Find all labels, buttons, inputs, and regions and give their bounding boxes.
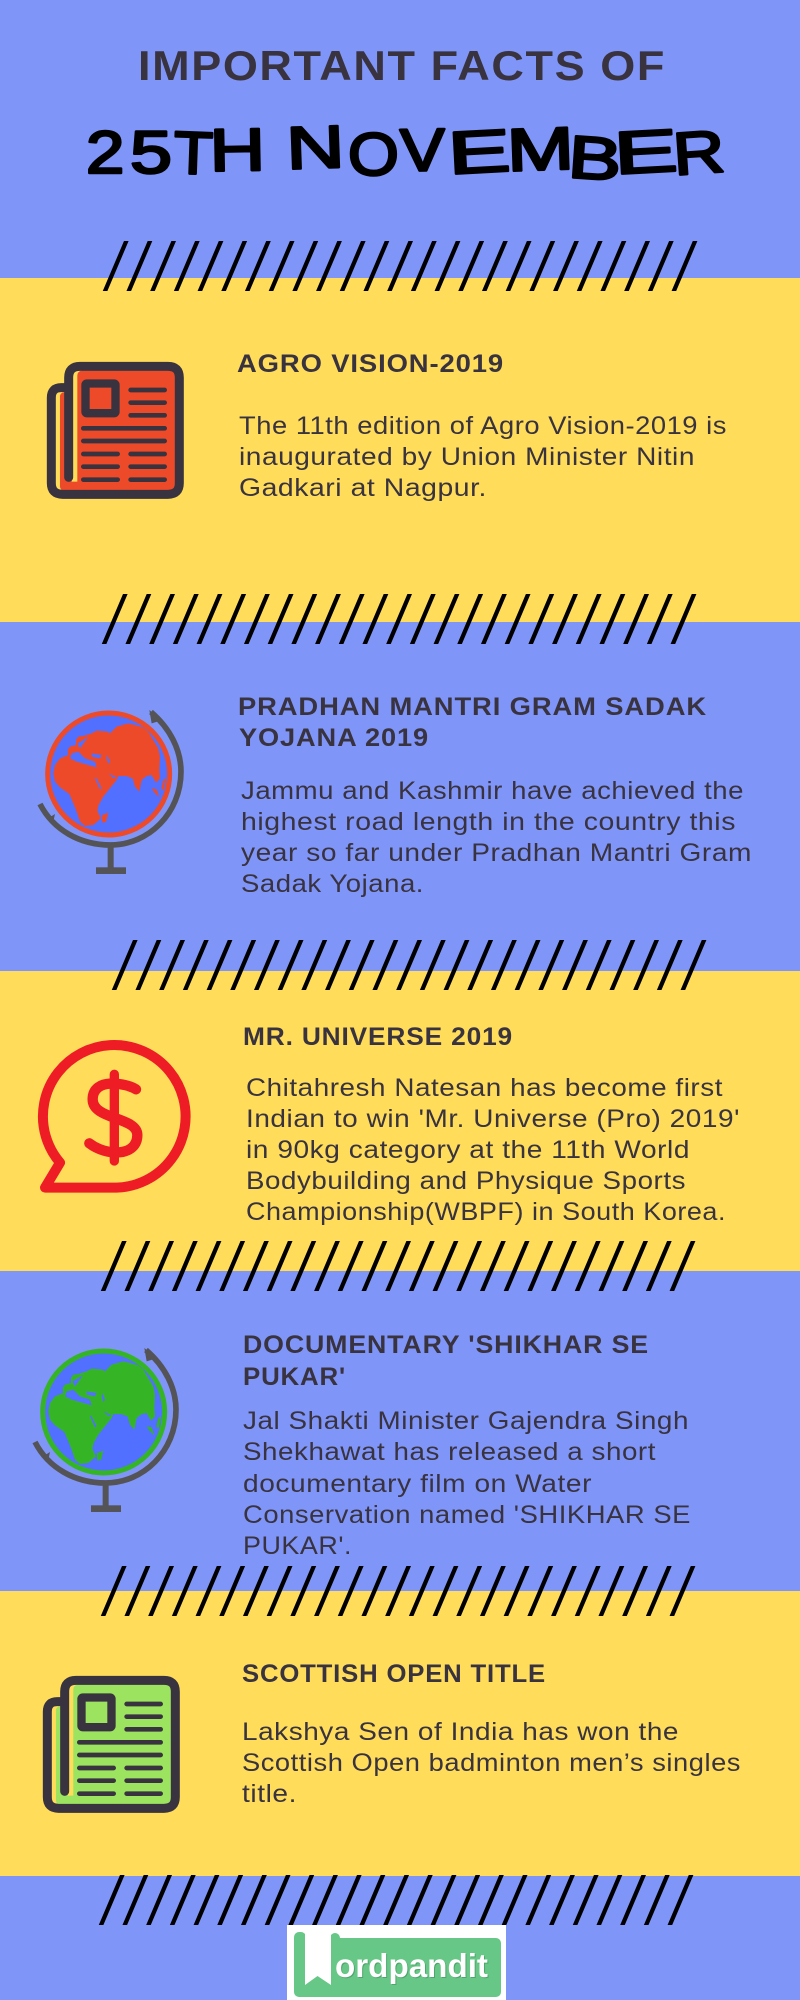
text block: Documentary body: Conservation named 'SHIKHAR SE — [243, 1501, 691, 1529]
logo: Wordpandit: ordpandit — [336, 1948, 489, 1985]
heading: Documentary Shikhar Se Pukar: PUKAR' — [243, 1363, 346, 1391]
panel: Mr. Universe yellow band — [0, 971, 800, 1271]
text block: Pradhan Mantri body — [241, 777, 752, 898]
heading: Documentary Shikhar Se Pukar — [243, 1331, 649, 1391]
text block: Documentary body: Jal Shakti Minister Gajendra Singh — [243, 1407, 689, 1435]
text block: Agro Vision body — [239, 412, 727, 502]
icon: green newspaper — [47, 1680, 175, 1808]
title: 25th November — [86, 114, 727, 193]
text block: Pradhan Mantri body: highest road length in the country this — [241, 808, 736, 836]
title: 25th November: H — [209, 116, 266, 184]
text block: Scottish Open body: title. — [242, 1780, 297, 1808]
text block: Scottish Open body — [242, 1718, 741, 1808]
heading: Pradhan Mantri Gram Sadak Yojana 2019 — [238, 693, 707, 752]
title: 25th November: 2 — [86, 118, 124, 186]
title: 25th November: 5 — [130, 119, 172, 186]
logo: Wordpandit: ordpandit — [335, 1947, 488, 1984]
panel: Agro Vision yellow band — [0, 278, 800, 622]
title: 25th November: E — [612, 117, 679, 187]
heading: Mr. Universe 2019: MR. UNIVERSE 2019 — [243, 1023, 513, 1051]
title: Important Facts Of: IMPORTANT FACTS OF — [138, 42, 666, 89]
text block: Mr. Universe body: in 90kg category at the 11th World — [246, 1136, 690, 1164]
title: 25th November: O — [348, 121, 399, 188]
text block: Documentary body — [243, 1407, 691, 1560]
text block: Documentary body: documentary film on Water — [243, 1470, 592, 1498]
text block: Documentary body: PUKAR'. — [243, 1532, 352, 1560]
text block: Mr. Universe body: Championship(WBPF) in South Korea. — [246, 1198, 726, 1226]
icon: red globe — [40, 710, 181, 874]
text block: Mr. Universe body: Chitahresh Natesan has become first — [246, 1074, 723, 1102]
title: 25th November: B — [566, 123, 624, 193]
title: 25th November: N — [285, 114, 345, 183]
text block: Scottish Open body: Lakshya Sen of India has won the — [242, 1718, 679, 1746]
icon: green globe — [35, 1348, 176, 1512]
title: 25th November: R — [671, 117, 727, 188]
text block: Documentary body: Shekhawat has released a short — [243, 1438, 656, 1466]
text block: Pradhan Mantri body: Sadak Yojana. — [241, 870, 424, 898]
heading: Documentary Shikhar Se Pukar: DOCUMENTARY 'SHIKHAR SE — [243, 1331, 649, 1359]
text block: Agro Vision body: inaugurated by Union Minister Nitin — [239, 443, 695, 471]
text block: Scottish Open body: Scottish Open badminton men’s singles — [242, 1749, 741, 1777]
panel: Scottish Open yellow band — [0, 1591, 800, 1876]
heading: Pradhan Mantri Gram Sadak Yojana 2019: YOJANA 2019 — [239, 724, 429, 752]
text block: Mr. Universe body: Bodybuilding and Physique Sports — [246, 1167, 686, 1195]
title: 25th November: E — [446, 117, 512, 187]
heading: Pradhan Mantri Gram Sadak Yojana 2019: PRADHAN MANTRI GRAM SADAK — [238, 693, 707, 721]
icon: dollar speech bubble — [43, 1045, 186, 1188]
text block: Mr. Universe body: Indian to win 'Mr. Universe (Pro) 2019' — [246, 1105, 740, 1133]
title: 25th November: V — [400, 117, 446, 184]
text block: Pradhan Mantri body: year so far under Pradhan Mantri Gram — [241, 839, 752, 867]
heading: Scottish Open Title: SCOTTISH OPEN TITLE — [242, 1660, 546, 1688]
title: 25th November: T — [173, 120, 214, 188]
text block: Agro Vision body: Gadkari at Nagpur. — [239, 474, 487, 502]
icon: red newspaper — [51, 366, 179, 494]
text block: Agro Vision body: The 11th edition of Agro Vision-2019 is — [239, 412, 727, 440]
logo: Wordpandit — [287, 1925, 506, 2000]
title: 25th November: M — [506, 115, 575, 185]
heading: Agro Vision-2019: AGRO VISION-2019 — [237, 350, 504, 378]
text block: Pradhan Mantri body: Jammu and Kashmir have achieved the — [241, 777, 744, 805]
text block: Mr. Universe body — [246, 1074, 740, 1226]
